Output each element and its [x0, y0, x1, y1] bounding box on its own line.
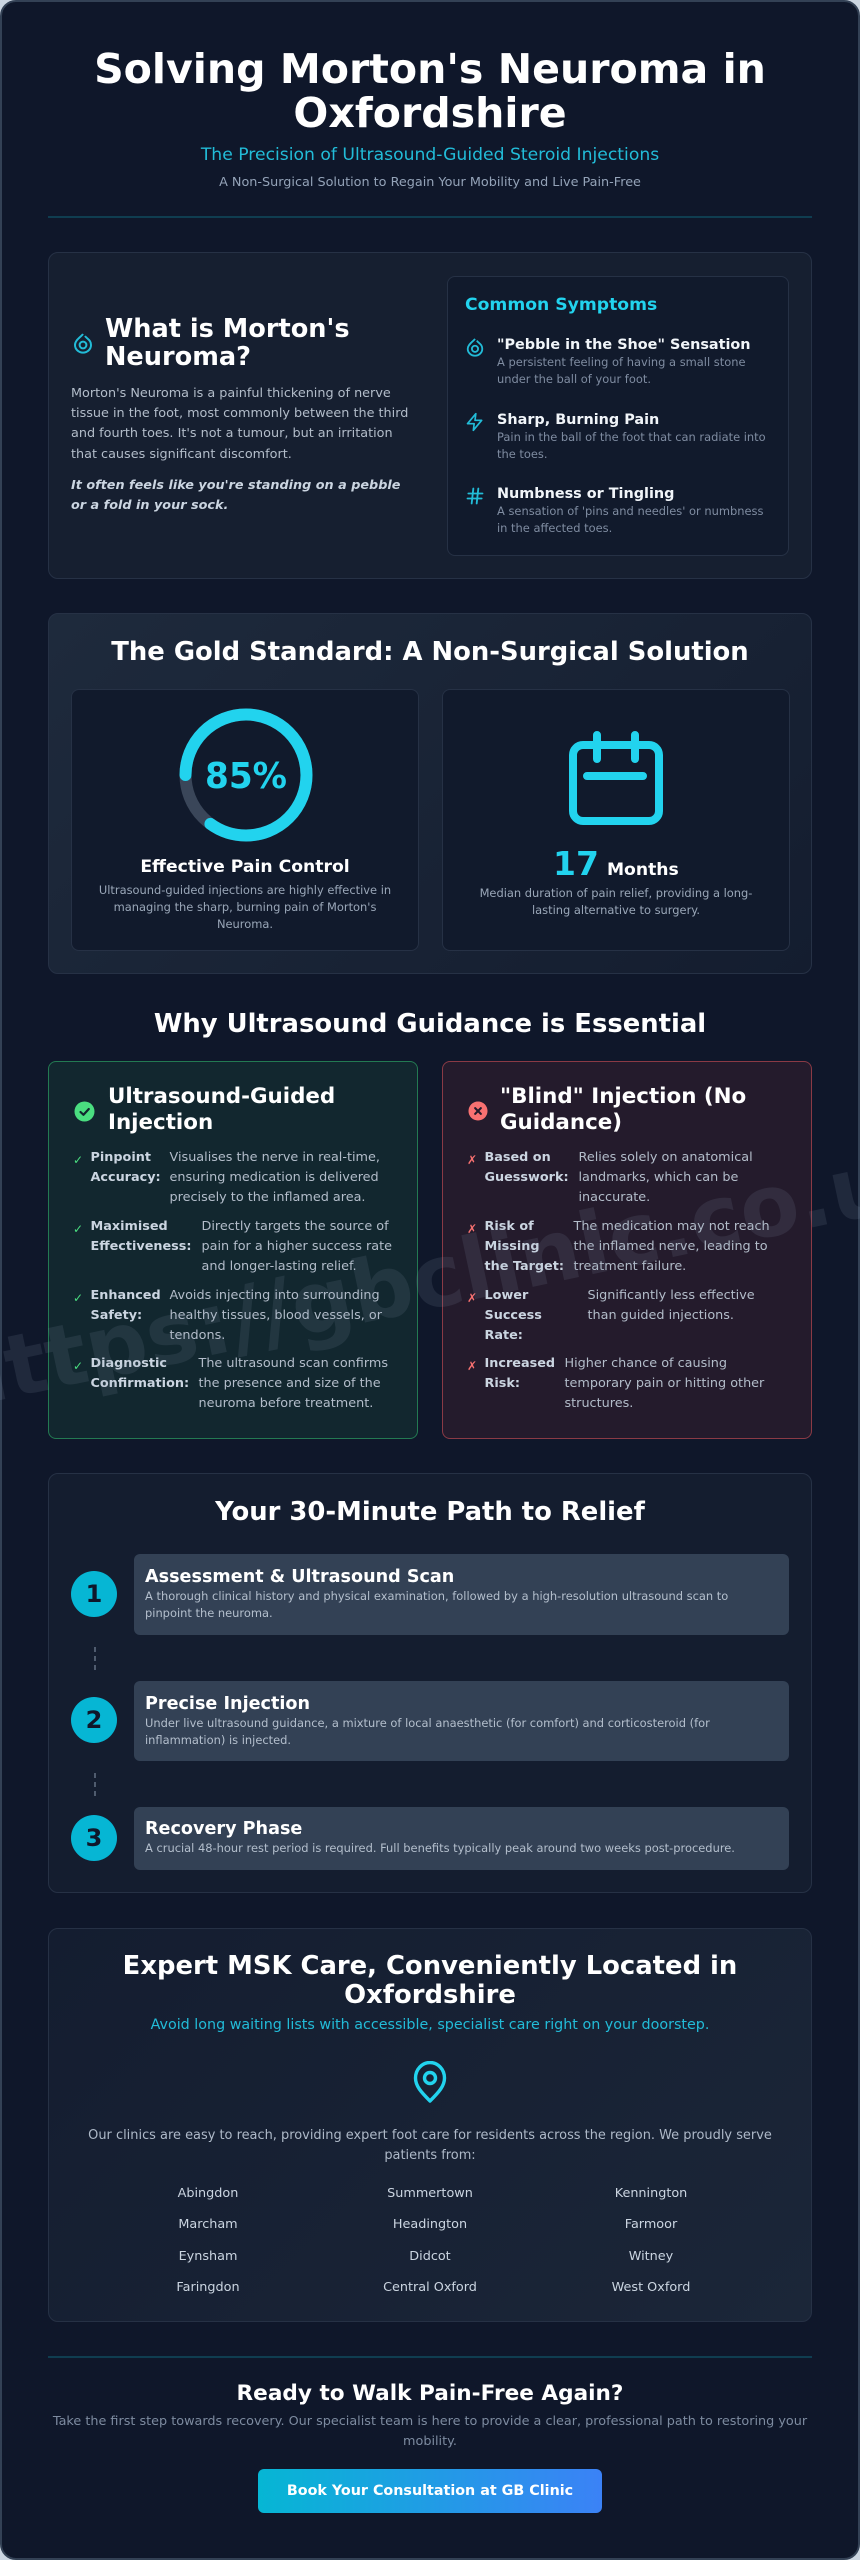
- panel: gold standard: [48, 613, 812, 974]
- card heading: Injection: [108, 1110, 213, 1135]
- item: enhanced safety: [73, 1288, 382, 1343]
- card heading: [500, 1084, 746, 1135]
- section heading: The Gold Standard: A Non-Surgical Solution: [111, 637, 749, 667]
- item: enhanced safety: Avoids injecting into surrounding: [170, 1288, 380, 1303]
- item: increased risk: ✗: [467, 1359, 477, 1373]
- item: missing the target: Missing: [484, 1239, 540, 1254]
- town list: Kennington: [615, 2186, 687, 2201]
- stat text: [99, 883, 391, 931]
- stat text: managing the sharp, burning pain of Morton's: [114, 900, 376, 914]
- item: maximised effectiveness: [73, 1219, 392, 1274]
- symptom title: "Pebble in the Shoe" Sensation: [497, 337, 751, 353]
- symptom text: [497, 355, 746, 386]
- connector 1: [94, 1647, 96, 1670]
- stat text: Ultrasound-guided injections are highly effective in: [99, 883, 391, 897]
- item: diagnostic confirmation: the presence and size of the: [198, 1376, 381, 1391]
- item: enhanced safety: healthy tissues, blood vessels, or: [170, 1308, 382, 1323]
- title: Solving Morton's Neuroma in: [94, 45, 766, 93]
- tagline: A Non-Surgical Solution to Regain Your Mobility and Live Pain-Free: [219, 175, 641, 190]
- item: increased risk: Increased: [484, 1356, 555, 1371]
- stat value: 17 Months: [553, 844, 679, 883]
- item: guesswork: landmarks, which can be: [578, 1170, 738, 1185]
- symptom title: Sharp, Burning Pain: [497, 412, 659, 428]
- step content: [134, 1554, 789, 1635]
- pull quote: or a fold in your sock.: [71, 498, 228, 513]
- item: guesswork: [467, 1150, 753, 1205]
- card heading: Guidance): [500, 1110, 622, 1135]
- section heading: Oxfordshire: [344, 1980, 516, 2010]
- symptom text: A sensation of 'pins and needles' or numbness: [497, 504, 763, 518]
- town list: Didcot: [409, 2249, 451, 2264]
- header rule: [48, 216, 812, 218]
- symptom text: [497, 504, 763, 535]
- item: lower success rate: [467, 1288, 755, 1343]
- icon: map pin: [414, 2061, 446, 2103]
- icon: pebble: [466, 338, 484, 357]
- item: diagnostic confirmation: ✓: [73, 1359, 83, 1373]
- panel: Oxfordshire locations: [48, 1928, 812, 2322]
- heading: What is Morton's: [105, 314, 350, 344]
- footer text: Take the first step towards recovery. Our specialist team is here to provide a clear, professional path to restoring your: [53, 2414, 807, 2429]
- stat label: Effective Pain Control: [140, 857, 350, 877]
- item: lower success rate: Lower: [484, 1288, 528, 1303]
- step number: 2: [86, 1706, 102, 1734]
- step content: A thorough clinical history and physical examination, followed by a high-resolution ultrasound scan to: [145, 1589, 728, 1603]
- panel: 30-minute path: [48, 1473, 812, 1893]
- step content: [134, 1681, 789, 1761]
- item: increased risk: [467, 1356, 764, 1411]
- symptom text: the toes.: [497, 447, 548, 461]
- description: and fourth toes. It's not a tumour, but an irritation: [71, 426, 393, 441]
- item: lower success rate: Rate:: [484, 1328, 523, 1343]
- town list: Eynsham: [179, 2249, 237, 2264]
- icon: red cross: [468, 1102, 488, 1120]
- connector 2: [94, 1773, 96, 1796]
- item: pinpoint accuracy: Pinpoint: [90, 1150, 151, 1165]
- icon: lightning: [466, 412, 482, 432]
- title: Oxfordshire: [293, 89, 567, 137]
- item: missing the target: [467, 1219, 770, 1274]
- item: diagnostic confirmation: [73, 1356, 388, 1411]
- card heading: "Blind" Injection (No: [500, 1084, 746, 1109]
- item: diagnostic confirmation: Diagnostic: [90, 1356, 167, 1371]
- town list: Marcham: [178, 2217, 238, 2232]
- panel: ultrasound-guided injection: [48, 1061, 418, 1439]
- step number: 1: [86, 1580, 102, 1608]
- section subtitle: Avoid long waiting lists with accessible, specialist care right on your doorstep.: [151, 2017, 709, 2033]
- button: [258, 2469, 602, 2513]
- symptom: pebble: [466, 337, 751, 386]
- footer call to action: [0, 2356, 860, 2526]
- town list: Abingdon: [178, 2186, 238, 2201]
- pull quote: It often feels like you're standing on a pebble: [71, 478, 400, 493]
- item: increased risk: Higher chance of causing: [564, 1356, 727, 1371]
- town list: Farmoor: [625, 2217, 677, 2232]
- item: pinpoint accuracy: Visualises the nerve in real-time,: [170, 1150, 380, 1165]
- town list: Witney: [629, 2249, 673, 2264]
- item: lower success rate: Significantly less effective: [588, 1288, 755, 1303]
- symptom: burning pain: [466, 412, 766, 461]
- item: guesswork: Based on: [484, 1150, 551, 1165]
- card heading: Ultrasound-Guided: [108, 1084, 335, 1109]
- symptom text: under the ball of your foot.: [497, 372, 651, 386]
- icon: green check: [74, 1102, 94, 1122]
- button: Book Your Consultation at GB Clinic: [287, 2483, 573, 2499]
- item: maximised effectiveness: Maximised: [90, 1219, 168, 1234]
- item: missing the target: The medication may not reach: [574, 1219, 770, 1234]
- item: guesswork: Guesswork:: [484, 1170, 569, 1185]
- panel: blind injection: [442, 1061, 812, 1439]
- description: [71, 386, 408, 462]
- section heading: [123, 1951, 737, 2010]
- stat text: lasting alternative to surgery.: [532, 903, 700, 917]
- item: maximised effectiveness: pain for a higher success rate: [202, 1239, 392, 1254]
- heading: why ultrasound guidance: Why Ultrasound Guidance is Essential: [154, 1009, 706, 1039]
- item: diagnostic confirmation: Confirmation:: [90, 1376, 189, 1391]
- item: missing the target: Risk of: [484, 1219, 534, 1234]
- header: [48, 45, 812, 218]
- item: missing the target: the Target:: [484, 1259, 564, 1274]
- item: increased risk: structures.: [564, 1396, 633, 1411]
- footer heading: Ready to Walk Pain-Free Again?: [237, 2381, 623, 2406]
- town list: West Oxford: [612, 2280, 690, 2295]
- item: pinpoint accuracy: Accuracy:: [90, 1170, 161, 1185]
- item: maximised effectiveness: Effectiveness:: [90, 1239, 192, 1254]
- panel: what is Morton's Neuroma: [48, 252, 812, 579]
- stat text: Neuroma.: [217, 917, 273, 931]
- description: that causes significant discomfort.: [71, 447, 292, 462]
- step content: pinpoint the neuroma.: [145, 1606, 273, 1620]
- item: enhanced safety: tendons.: [170, 1328, 225, 1343]
- service area text: Our clinics are easy to reach, providing expert foot care for residents across the region. We proudly serve: [88, 2128, 772, 2143]
- chart: 85 percent ring: 85%: [205, 756, 287, 797]
- description: Morton's Neuroma is a painful thickening of nerve: [71, 386, 391, 401]
- item: guesswork: ✗: [467, 1153, 477, 1167]
- chart: 85 percent ring: [180, 708, 312, 842]
- icon: calendar: [569, 731, 663, 825]
- item: guesswork: inaccurate.: [578, 1190, 650, 1205]
- service area text: patients from:: [384, 2148, 476, 2163]
- item: increased risk: temporary pain or hitting other: [564, 1376, 764, 1391]
- symptom text: A persistent feeling of having a small stone: [497, 355, 746, 369]
- panel: common symptoms: [447, 276, 789, 556]
- item: missing the target: the inflamed nerve, leading to: [574, 1239, 768, 1254]
- item: guesswork: Relies solely on anatomical: [578, 1150, 753, 1165]
- town list: Headington: [393, 2217, 467, 2232]
- symptom text: in the affected toes.: [497, 521, 612, 535]
- town list: Summertown: [387, 2186, 473, 2201]
- item: diagnostic confirmation: neuroma before treatment.: [198, 1396, 373, 1411]
- step content: Under live ultrasound guidance, a mixture of local anaesthetic (for comfort) and corticosteroid (for: [145, 1716, 710, 1730]
- item: increased risk: Risk:: [484, 1376, 520, 1391]
- stat card: 85%: [71, 689, 419, 951]
- item: maximised effectiveness: and longer-lasting relief.: [202, 1259, 357, 1274]
- step 1: [71, 1554, 789, 1635]
- step content: Precise Injection: [145, 1694, 310, 1714]
- item: pinpoint accuracy: ✓: [73, 1153, 83, 1167]
- item: pinpoint accuracy: precisely to the inflamed area.: [170, 1190, 366, 1205]
- step content: Recovery Phase: [145, 1819, 302, 1839]
- item: pinpoint accuracy: ensuring medication is delivered: [170, 1170, 379, 1185]
- item: diagnostic confirmation: The ultrasound scan confirms: [198, 1356, 388, 1371]
- footer text: [0, 2412, 860, 2452]
- step number: 3: [86, 1824, 102, 1852]
- step content: A crucial 48-hour rest period is required. Full benefits typically peak around two weeks post-procedure.: [145, 1841, 735, 1855]
- icon: hash: [466, 488, 484, 504]
- step content: [134, 1807, 789, 1870]
- item: missing the target: treatment failure.: [574, 1259, 686, 1274]
- item: maximised effectiveness: Directly targets the source of: [202, 1219, 389, 1234]
- icon: pebble target: [74, 334, 92, 354]
- subtitle: The Precision of Ultrasound-Guided Steroid Injections: [201, 145, 659, 165]
- title: [94, 45, 766, 137]
- town list: Central Oxford: [383, 2280, 477, 2295]
- item: maximised effectiveness: ✓: [73, 1222, 83, 1236]
- symptom: numbness: [466, 486, 763, 535]
- item: lower success rate: ✗: [467, 1291, 477, 1305]
- step number: [71, 1697, 117, 1743]
- symptom text: [497, 430, 766, 461]
- step content: Assessment & Ultrasound Scan: [145, 1567, 454, 1587]
- description: tissue in the foot, most commonly between the third: [71, 406, 408, 421]
- item: lower success rate: Success: [484, 1308, 542, 1323]
- service area text: [88, 2128, 772, 2163]
- step 2: [71, 1681, 789, 1761]
- stat text: [480, 886, 752, 917]
- step 3: [71, 1807, 789, 1870]
- symptom title: Numbness or Tingling: [497, 486, 674, 502]
- step content: inflammation) is injected.: [145, 1733, 291, 1747]
- item: pinpoint accuracy: [73, 1150, 380, 1205]
- stat text: Median duration of pain relief, providing a long-: [480, 886, 752, 900]
- footer rule: [48, 2356, 812, 2358]
- step number: [71, 1571, 117, 1617]
- section heading: Expert MSK Care, Conveniently Located in: [123, 1951, 737, 1981]
- symptoms heading: Common Symptoms: [465, 295, 657, 315]
- card heading: [108, 1084, 335, 1135]
- heading: [105, 314, 350, 372]
- section heading: Your 30-Minute Path to Relief: [215, 1497, 645, 1527]
- town list: [176, 2186, 690, 2295]
- item: enhanced safety: Enhanced: [90, 1288, 161, 1303]
- symptom text: Pain in the ball of the foot that can radiate into: [497, 430, 766, 444]
- step number: [71, 1815, 117, 1861]
- footer text: mobility.: [403, 2434, 457, 2449]
- stat card: 17 months: [442, 689, 790, 951]
- town list: Faringdon: [176, 2280, 240, 2295]
- pull quote: [71, 478, 400, 513]
- item: lower success rate: than guided injections.: [588, 1308, 734, 1323]
- heading: Neuroma?: [105, 342, 251, 372]
- item: enhanced safety: ✓: [73, 1291, 83, 1305]
- item: missing the target: ✗: [467, 1222, 477, 1236]
- item: enhanced safety: Safety:: [90, 1308, 142, 1323]
